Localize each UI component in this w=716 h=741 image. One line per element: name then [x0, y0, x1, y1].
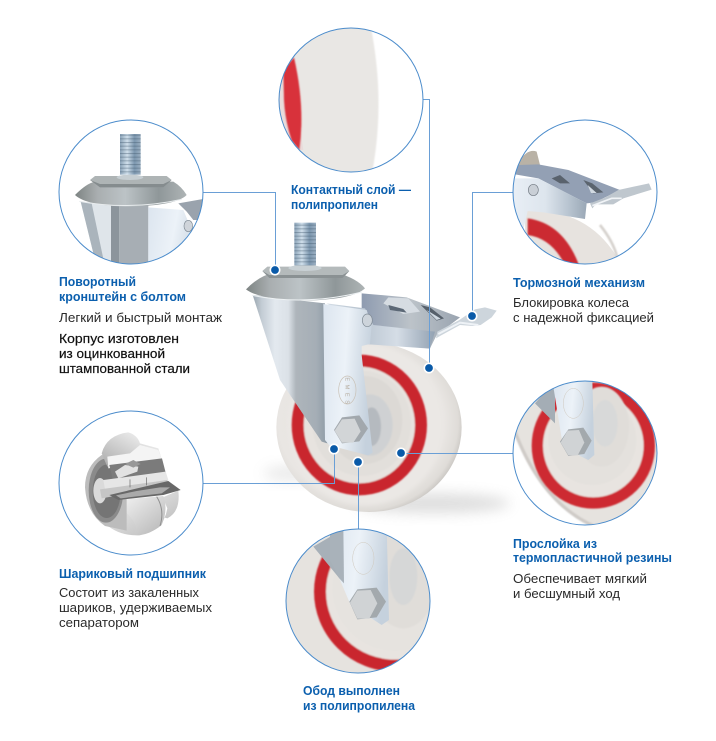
- heading: rim: из полипропилена: [303, 699, 416, 713]
- main caster wheel: [246, 223, 510, 513]
- icon: lower wheel body: [105, 491, 179, 535]
- body: brake: Блокировка колеса: [513, 295, 630, 310]
- icon: left face: [85, 455, 127, 531]
- heading: rim: Обод выполнен: [303, 684, 400, 698]
- leader line: contact layer: [423, 100, 430, 368]
- heading: brake mechanism: Тормозной механизм: [513, 276, 645, 290]
- detail circle: rubber layer: [512, 380, 658, 526]
- heading: contact layer: полипропилен: [291, 198, 378, 212]
- leader line: bearing: [203, 449, 334, 484]
- body: ball bearing: сепаратором: [59, 615, 139, 630]
- text block: ball bearing: [59, 567, 213, 630]
- leader line: swivel bracket: [204, 192, 276, 270]
- leader line: rubber layer: [401, 452, 513, 454]
- body: brake: с надежной фиксацией: [513, 310, 654, 325]
- text block: rubber layer: [513, 537, 672, 601]
- body: ball bearing: Состоит из закаленных: [59, 585, 199, 600]
- detail circle: ball bearing: [59, 411, 203, 555]
- logo: EMES stamp: EMES: [343, 377, 349, 404]
- text block: brake mechanism: [513, 276, 654, 325]
- logo: EMES stamp: [339, 376, 356, 404]
- body: housing: из оцинкованной: [59, 346, 165, 361]
- body: rubber: и бесшумный ход: [513, 586, 620, 601]
- icon: interior cutaway: [109, 458, 166, 478]
- detail circle: contact layer: [278, 28, 424, 172]
- detail circle: swivel bracket with bolt: [59, 120, 207, 268]
- detail circle: brake mechanism: [512, 120, 657, 272]
- icon: shaft: [103, 472, 168, 489]
- heading: rubber layer: термопластичной резины: [513, 551, 672, 565]
- body: housing: Корпус изготовлен: [59, 331, 179, 346]
- icon: lower cutaway: [109, 481, 181, 500]
- icon: upper flange: [102, 432, 162, 467]
- body: rubber: Обеспечивает мягкий: [513, 571, 647, 586]
- body: mounting: Легкий и быстрый монтаж: [59, 310, 222, 325]
- heading: rubber layer: Прослойка из: [513, 537, 597, 551]
- heading: contact layer: Контактный слой —: [291, 183, 411, 197]
- marker dots: [270, 265, 477, 467]
- body: housing: штампованной стали: [59, 361, 190, 376]
- heading: swivel bracket: Поворотный: [59, 275, 136, 289]
- leader line: rim: [358, 462, 360, 529]
- leader line: brake: [472, 192, 513, 316]
- detail circle: rim: [286, 528, 430, 674]
- heading: ball bearing: Шариковый подшипник: [59, 567, 207, 581]
- text block: swivel bracket: [59, 275, 222, 376]
- body: ball bearing: шариков, удерживаемых: [59, 600, 213, 615]
- heading: swivel bracket: кронштейн с болтом: [59, 290, 186, 304]
